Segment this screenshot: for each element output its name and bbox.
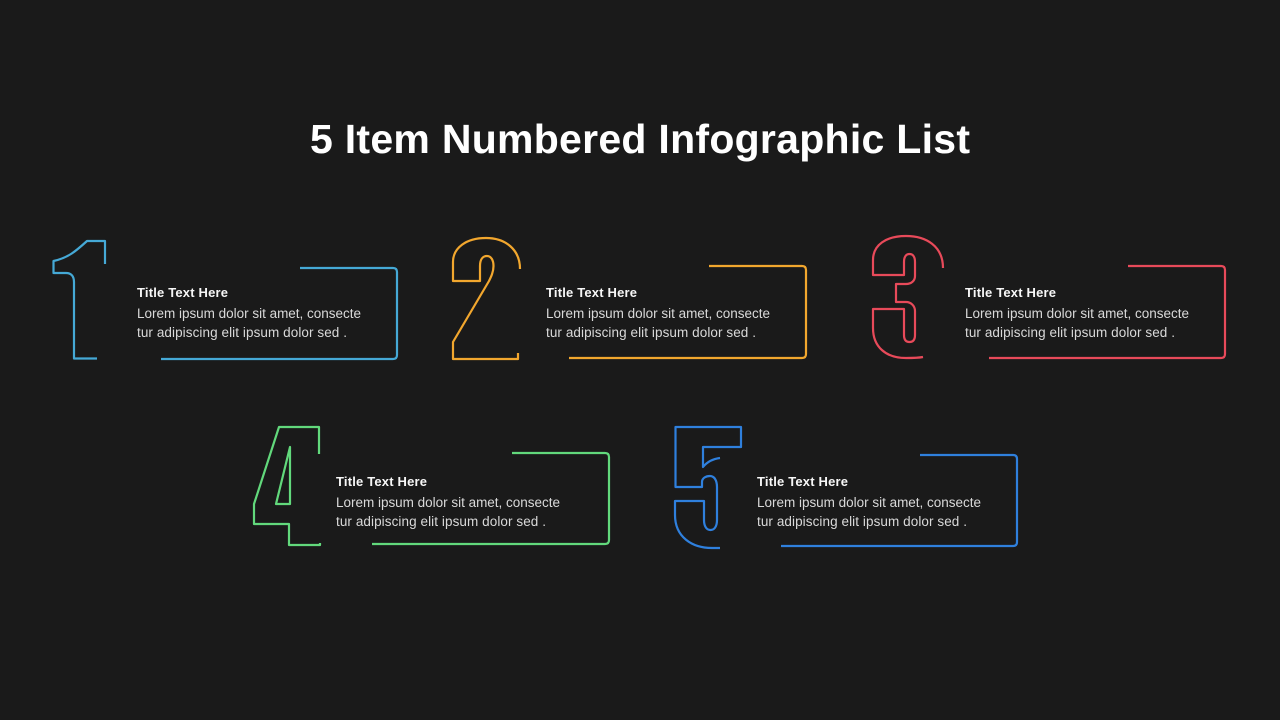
- text block: item 2: [546, 285, 770, 340]
- frame: item 4: [372, 453, 609, 544]
- text block: item 2: Lorem ipsum dolor sit amet, consecte: [546, 306, 770, 321]
- text block: item 3: tur adipiscing elit ipsum dolor sed .: [965, 325, 1175, 340]
- text block: item 5: Title Text Here: [757, 474, 848, 489]
- number outline: 1: [54, 241, 105, 358]
- text block: item 4: [336, 474, 560, 529]
- text block: item 1: [137, 285, 361, 340]
- text block: item 5: tur adipiscing elit ipsum dolor sed .: [757, 514, 967, 529]
- text block: item 4: tur adipiscing elit ipsum dolor sed .: [336, 514, 546, 529]
- text block: item 3: Title Text Here: [965, 285, 1056, 300]
- text block: item 1: Title Text Here: [137, 285, 228, 300]
- panel: item 2: [453, 238, 806, 359]
- frame: item 2: [569, 266, 806, 358]
- text block: item 5: [757, 474, 981, 529]
- number outline: 3: [873, 236, 943, 358]
- panel: item 3: [873, 236, 1225, 358]
- text block: item 2: Title Text Here: [546, 285, 637, 300]
- text block: item 5: Lorem ipsum dolor sit amet, consecte: [757, 495, 981, 510]
- text block: item 1: tur adipiscing elit ipsum dolor sed .: [137, 325, 347, 340]
- text block: item 2: tur adipiscing elit ipsum dolor sed .: [546, 325, 756, 340]
- text block: item 3: Lorem ipsum dolor sit amet, consecte: [965, 306, 1189, 321]
- text block: item 1: Lorem ipsum dolor sit amet, consecte: [137, 306, 361, 321]
- number outline: 4: [254, 427, 320, 545]
- panel: item 5: [675, 427, 1017, 548]
- number outline: 2: [453, 238, 520, 359]
- frame: item 3: [989, 266, 1225, 358]
- number outline: 5: [675, 427, 741, 548]
- text block: item 3: [965, 285, 1189, 340]
- text block: item 4: Lorem ipsum dolor sit amet, consecte: [336, 495, 560, 510]
- title: 5 Item Numbered Infographic List: [310, 116, 970, 162]
- text block: item 4: Title Text Here: [336, 474, 427, 489]
- frame: item 5: [781, 455, 1017, 546]
- panel: item 1: [54, 241, 397, 359]
- frame: item 1: [161, 268, 397, 359]
- panel: item 4: [254, 427, 609, 545]
